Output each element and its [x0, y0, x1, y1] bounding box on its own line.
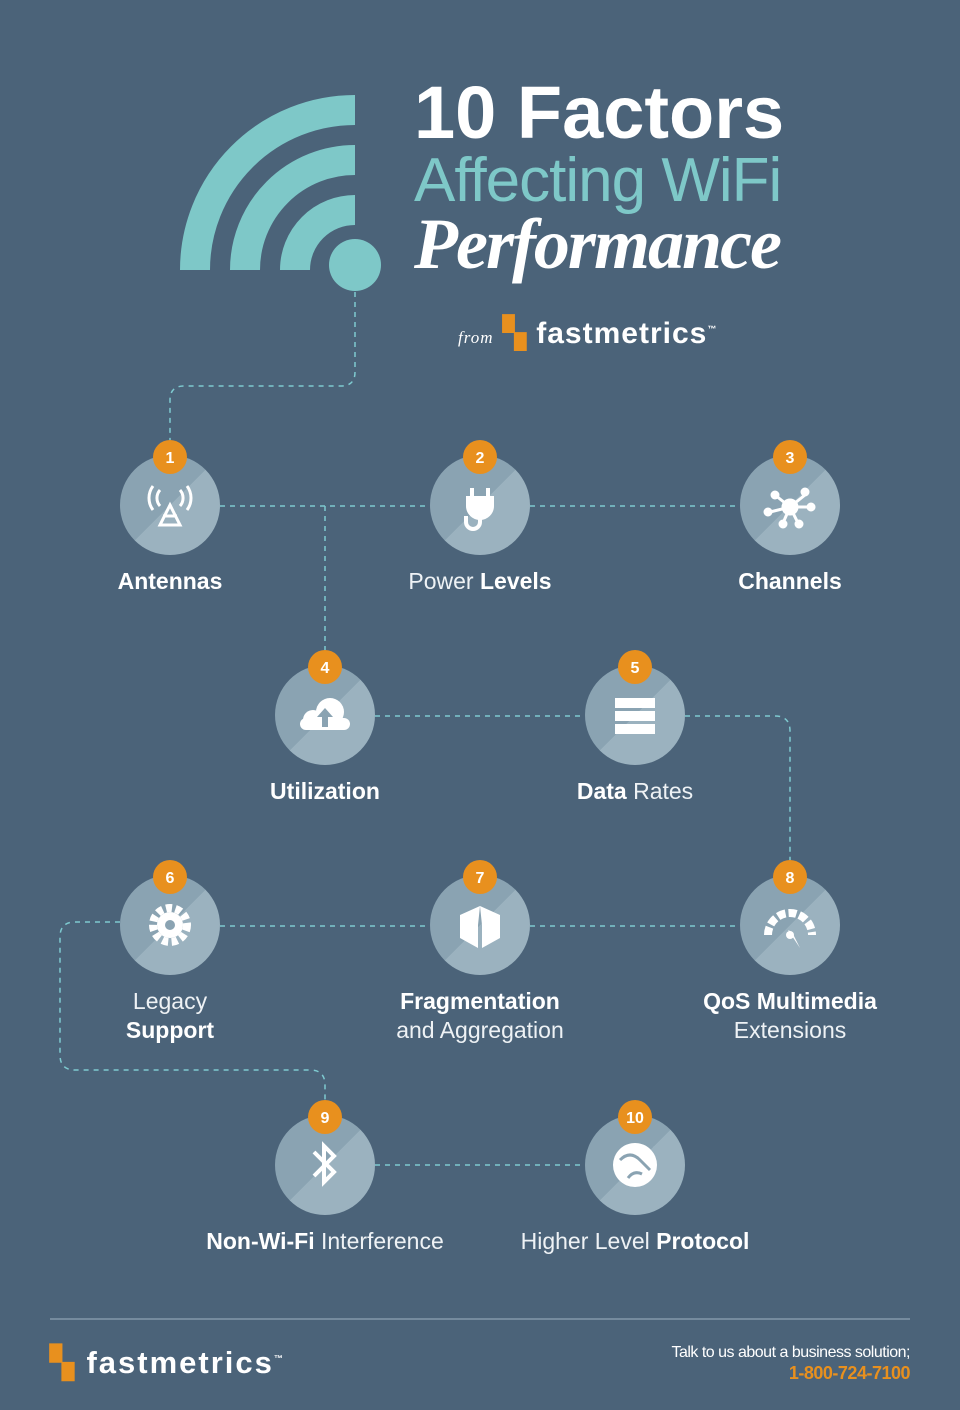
label: Fragmentation: and Aggregation — [396, 1017, 564, 1043]
footer contact — [671, 1344, 910, 1383]
nodes: 6 — [166, 870, 175, 887]
footer contact: Talk to us about a business solution; — [671, 1344, 910, 1361]
label: QoS: Extensions — [734, 1017, 846, 1043]
icon: antenna — [149, 486, 191, 525]
label: Data Rates: Data Rates — [577, 778, 693, 804]
icon: bluetooth — [314, 1146, 334, 1182]
nodes: 2 — [476, 450, 485, 467]
label: Legacy Support: Support — [126, 1017, 214, 1043]
label: Fragmentation — [396, 988, 564, 1043]
label: Channels: Channels — [738, 568, 842, 594]
icon: plug — [466, 488, 492, 529]
icon: server — [615, 698, 655, 734]
nodes: 7 — [476, 870, 485, 887]
title: 10 Factors — [414, 71, 784, 154]
label: Legacy Support: Legacy — [133, 988, 207, 1014]
icon: cloud — [300, 698, 350, 730]
icon: globe — [613, 1143, 657, 1187]
icon: gauge — [768, 913, 812, 948]
wifi icon — [195, 110, 355, 270]
nodes: 1 — [166, 450, 175, 467]
icon: gear — [153, 908, 187, 942]
icon: network — [765, 489, 814, 527]
nodes: 10 — [626, 1110, 644, 1127]
footer logo: ▚ fastmetrics™ — [50, 1345, 285, 1380]
label: Utilization: Utilization — [270, 778, 380, 804]
nodes: 5 — [631, 660, 640, 677]
label: Non-Wi-Fi Interference: Non-Wi-Fi Interference — [206, 1228, 444, 1254]
nodes: 8 — [786, 870, 795, 887]
label: Fragmentation: Fragmentation — [400, 988, 560, 1014]
icon: box — [460, 906, 500, 948]
nodes: 4 — [321, 660, 330, 677]
label: Higher Level Protocol: Higher Level Protocol — [521, 1228, 749, 1254]
label: Antennas: Antennas — [118, 568, 222, 594]
nodes: 3 — [786, 450, 795, 467]
label: QoS: QoS Multimedia — [703, 988, 877, 1014]
title — [414, 71, 784, 284]
title: Performance — [414, 204, 780, 284]
label: Power Levels: Power Levels — [408, 568, 552, 594]
from fastmetrics: from ▚ fastmetrics™ — [458, 317, 717, 350]
badges — [153, 440, 807, 1134]
title: Affecting WiFi — [414, 146, 781, 215]
footer contact: 1-800-724-7100 — [789, 1363, 910, 1383]
nodes: 9 — [321, 1110, 330, 1127]
node circles — [120, 455, 840, 1215]
label: QoS — [703, 988, 878, 1043]
label: Legacy Support — [126, 988, 214, 1043]
